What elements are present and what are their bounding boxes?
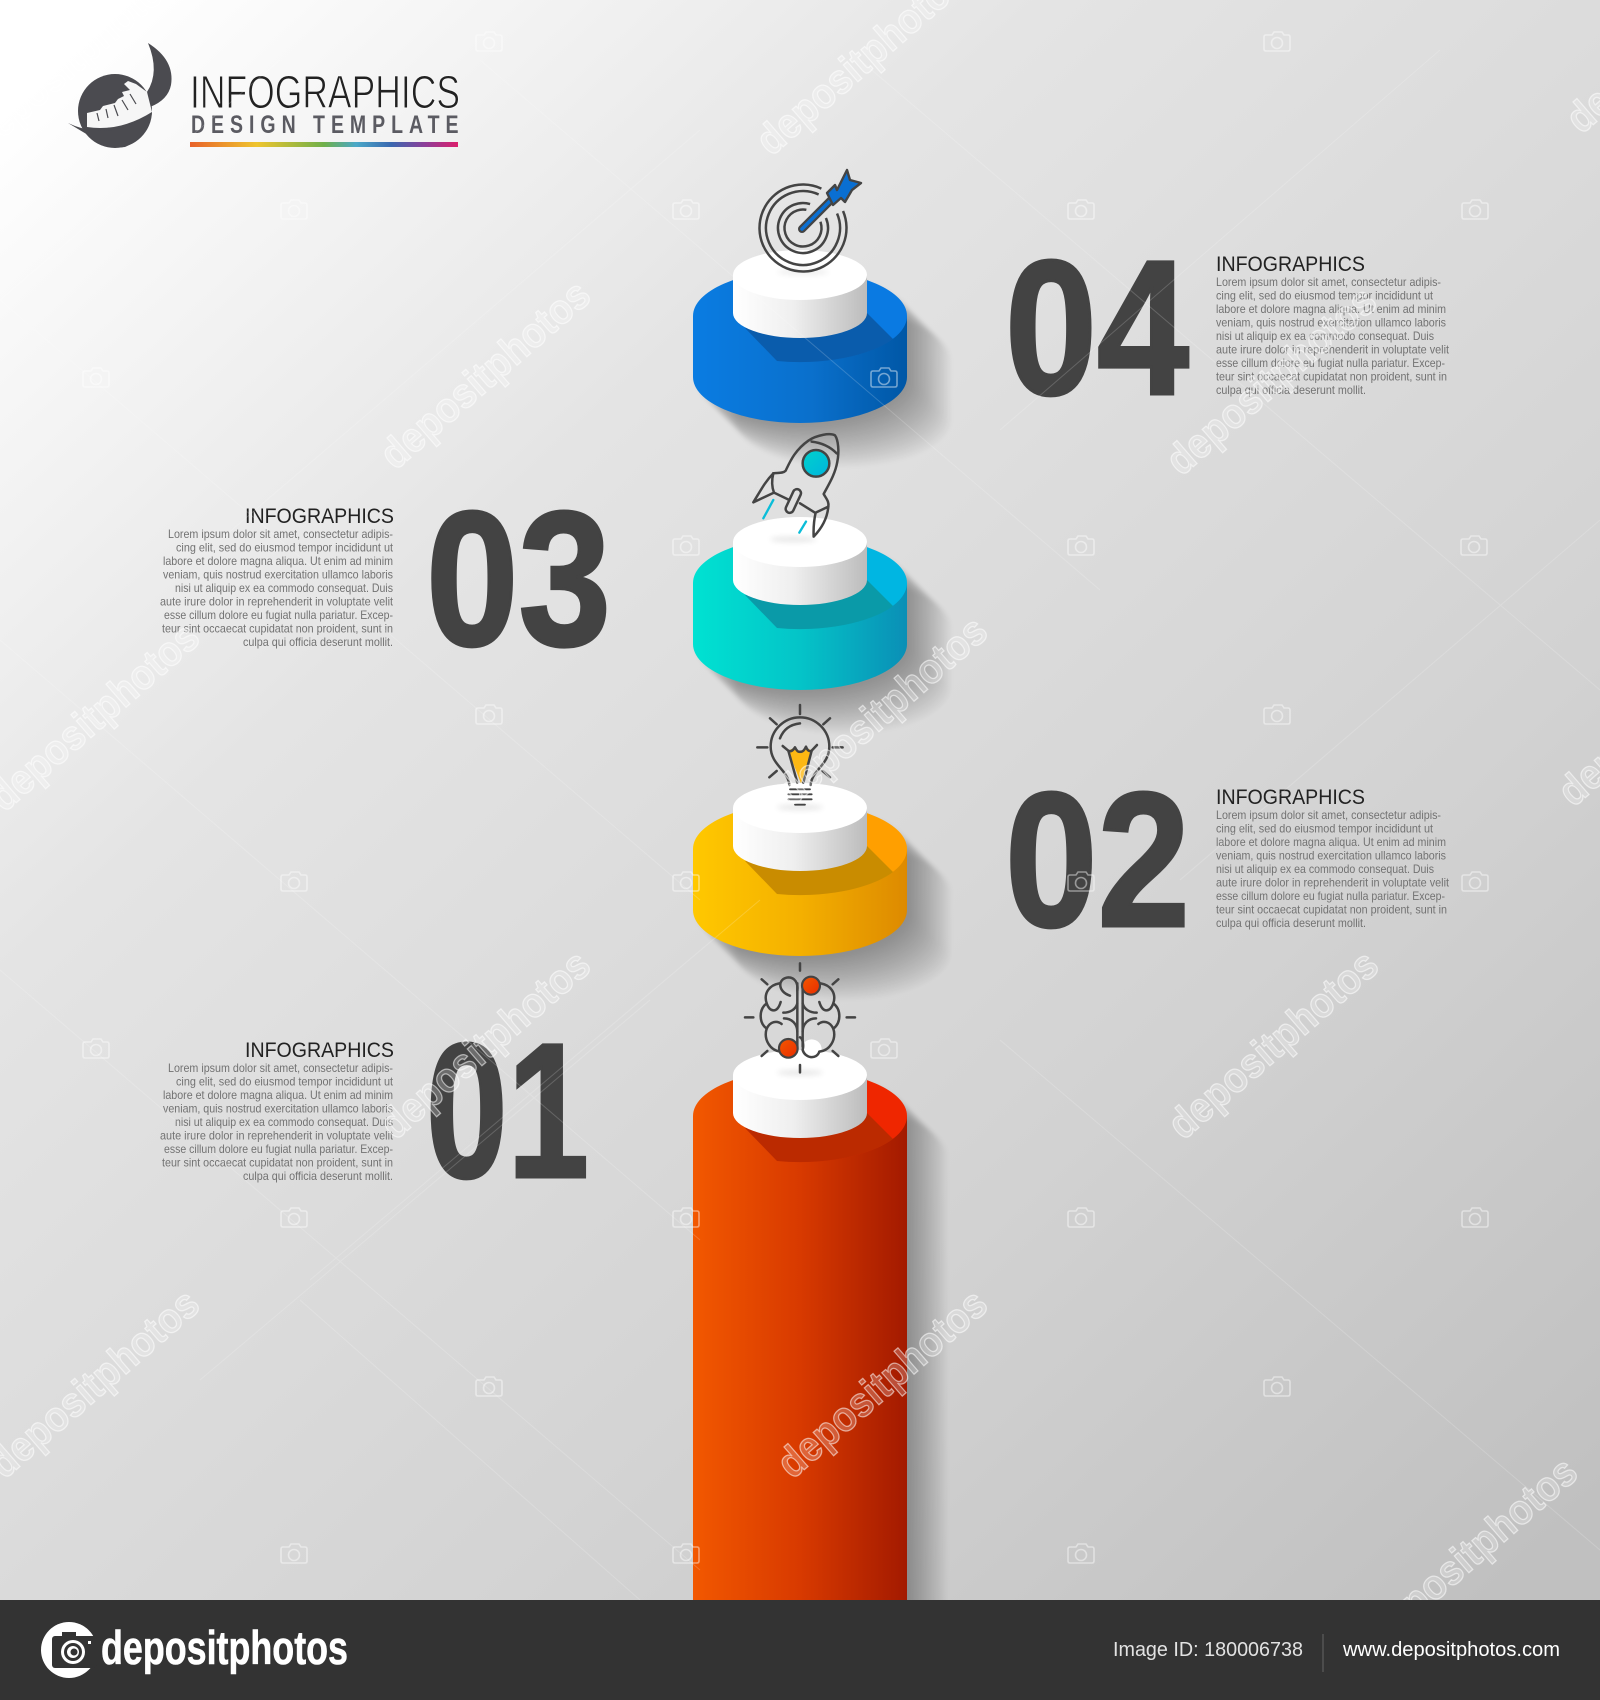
paragraph 01: aute irure dolor in reprehenderit in voluptate velit: [160, 1128, 394, 1142]
paragraph 03: aute irure dolor in reprehenderit in voluptate velit: [160, 594, 394, 608]
paragraph 04: nisi ut aliquip ex ea commodo consequat. Duis: [1216, 329, 1434, 343]
paragraph 04: [1216, 275, 1450, 397]
watermarks: depositphotos: [767, 606, 996, 814]
watermarks: depositphotos: [370, 270, 599, 478]
paragraph 04: teur sint occaecat cupidatat non proident, sunt in: [1216, 370, 1447, 384]
footer camera logo: [41, 1622, 97, 1678]
paragraph 02: cing elit, sed do eiusmod tempor incididunt ut: [1216, 822, 1434, 836]
watermarks: depositphotos: [1357, 1447, 1586, 1655]
heading 03: INFOGRAPHICS: [245, 505, 394, 528]
paragraph 02: culpa qui officia deserunt mollit.: [1216, 916, 1366, 930]
logo title: INFOGRAPHICS: [190, 66, 460, 118]
paragraph 02: Lorem ipsum dolor sit amet, consectetur adipis-: [1216, 808, 1441, 822]
paragraph 01: [160, 1061, 394, 1183]
paragraph 01: cing elit, sed do eiusmod tempor incididunt ut: [176, 1074, 394, 1088]
paragraph 04: esse cillum dolore eu fugiat nulla pariatur. Excep-: [1216, 356, 1445, 370]
icon: light bulb: [757, 705, 843, 810]
number 01: 01: [426, 1003, 589, 1218]
paragraph 01: culpa qui officia deserunt mollit.: [243, 1169, 393, 1183]
paragraph 04: cing elit, sed do eiusmod tempor incididunt ut: [1216, 288, 1434, 302]
paragraph 01: esse cillum dolore eu fugiat nulla pariatur. Excep-: [164, 1142, 393, 1156]
watermarks: depositphotos: [370, 940, 599, 1148]
heading 04: INFOGRAPHICS: [1216, 253, 1365, 276]
paragraph 03: esse cillum dolore eu fugiat nulla pariatur. Excep-: [164, 608, 393, 622]
website: www.depositphotos.com: [1342, 1639, 1560, 1661]
logo subtitle: DESIGN TEMPLATE: [191, 111, 459, 139]
paragraph 04: culpa qui officia deserunt mollit.: [1216, 383, 1366, 397]
paragraph 02: [1216, 808, 1450, 930]
paragraph 01: veniam, quis nostrud exercitation ullamco laboris: [163, 1102, 393, 1116]
logo: [68, 43, 460, 148]
paragraph 03: teur sint occaecat cupidatat non proident, sunt in: [162, 622, 393, 636]
icon: rocket: [753, 434, 838, 542]
paragraph 04: aute irure dolor in reprehenderit in voluptate velit: [1216, 342, 1450, 356]
white cap 04: [733, 250, 867, 338]
icon: target with arrow: [746, 170, 861, 285]
paragraph 03: [160, 527, 394, 649]
blue disc: step 04: [693, 250, 907, 423]
rainbow bar: [190, 142, 458, 147]
number 04: 04: [1005, 220, 1189, 435]
paragraph 03: culpa qui officia deserunt mollit.: [243, 635, 393, 649]
paragraph 02: veniam, quis nostrud exercitation ullamco laboris: [1216, 848, 1446, 862]
white cap 02: [733, 783, 867, 871]
number 02: 02: [1005, 752, 1190, 967]
long shadows of discs: [696, 273, 950, 1679]
white cap 03: [733, 517, 867, 605]
paragraph 04: labore et dolore magna aliqua. Ut enim ad minim: [1216, 302, 1446, 316]
icon: brain: [745, 963, 855, 1075]
paragraph 03: nisi ut aliquip ex ea commodo consequat. Duis: [175, 581, 393, 595]
text block 01: [160, 1039, 394, 1183]
paragraph 02: teur sint occaecat cupidatat non proident, sunt in: [1216, 902, 1447, 916]
logo globe icon: [68, 43, 172, 148]
paragraph 04: veniam, quis nostrud exercitation ullamco laboris: [1216, 316, 1446, 330]
paragraph 01: teur sint occaecat cupidatat non proident, sunt in: [162, 1156, 393, 1170]
heading 02: INFOGRAPHICS: [1216, 786, 1365, 809]
paragraph 02: labore et dolore magna aliqua. Ut enim ad minim: [1216, 835, 1446, 849]
white cap 01: [733, 1050, 867, 1138]
text block 02: [1216, 786, 1450, 930]
image id: Image ID: 180006738: [1113, 1639, 1303, 1661]
paragraph 03: labore et dolore magna aliqua. Ut enim ad minim: [163, 554, 393, 568]
watermarks: depositphotos: [1156, 276, 1385, 484]
paragraph 02: nisi ut aliquip ex ea commodo consequat. Duis: [1216, 862, 1434, 876]
watermarks: depositphotos: [1158, 940, 1387, 1148]
paragraph 03: cing elit, sed do eiusmod tempor incididunt ut: [176, 540, 394, 554]
footer brand name: depositphotos: [101, 1621, 348, 1674]
paragraph 01: labore et dolore magna aliqua. Ut enim ad minim: [163, 1088, 393, 1102]
paragraph 02: aute irure dolor in reprehenderit in voluptate velit: [1216, 876, 1450, 890]
paragraph 03: Lorem ipsum dolor sit amet, consectetur adipis-: [168, 527, 393, 541]
yellow disc: step 02: [693, 783, 907, 956]
heading 01: INFOGRAPHICS: [245, 1039, 394, 1062]
paragraph 02: esse cillum dolore eu fugiat nulla pariatur. Excep-: [1216, 889, 1445, 903]
teal disc: step 03: [693, 517, 907, 690]
footer bar: [0, 1600, 1600, 1700]
number 03: 03: [426, 471, 611, 686]
paragraph 03: veniam, quis nostrud exercitation ullamco laboris: [163, 568, 393, 582]
text block 04: [1216, 253, 1450, 397]
text block 03: [160, 505, 394, 649]
paragraph 04: Lorem ipsum dolor sit amet, consectetur adipis-: [1216, 275, 1441, 289]
red cylinder: step 01: [693, 1050, 907, 1600]
paragraph 01: nisi ut aliquip ex ea commodo consequat. Duis: [175, 1115, 393, 1129]
watermarks: depositphotos: [767, 1279, 996, 1487]
paragraph 01: Lorem ipsum dolor sit amet, consectetur adipis-: [168, 1061, 393, 1075]
